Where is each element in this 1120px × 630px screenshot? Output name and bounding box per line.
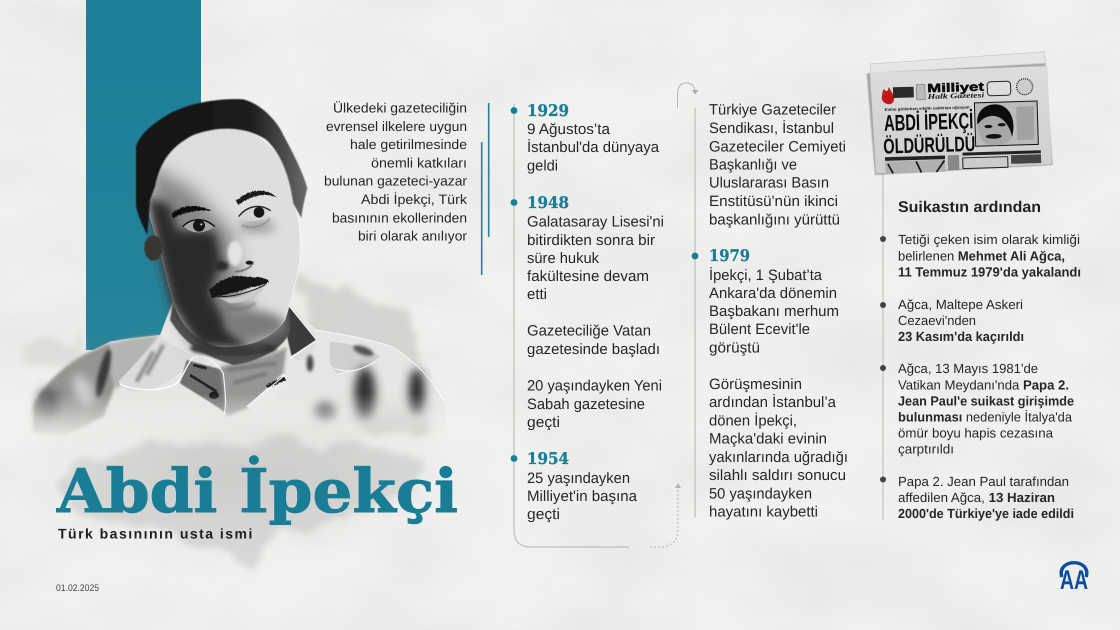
- aftermath item 1: [880, 232, 1081, 280]
- timeline: 1948: geçti: [527, 414, 560, 431]
- timeline: 1929: İstanbul'da dünyaya: [527, 138, 660, 156]
- intro paragraph: [324, 100, 467, 244]
- aftermath item 3: çarptırıldı: [898, 441, 954, 456]
- timeline: 1979: İpekçi, 1 Şubat’ta: [709, 266, 823, 284]
- masthead: [881, 78, 1033, 105]
- intro paragraph: Ülkedeki gazeteciliğin: [333, 100, 467, 116]
- timeline: 1954 continued: başkanlığını yürüttü: [709, 211, 840, 228]
- face: [145, 128, 300, 347]
- aftermath item 2: Ağca, Maltepe Askeri: [898, 297, 1023, 312]
- timeline: 1954: [511, 449, 638, 523]
- intro paragraph: Abdi İpekçi, Türk: [361, 192, 467, 207]
- masthead: Halk Gazetesi: [927, 91, 985, 101]
- aftermath item 2: [880, 297, 1024, 344]
- portrait: [27, 99, 448, 447]
- timeline: 1954: 25 yaşındayken: [527, 470, 630, 487]
- mouth: [218, 285, 265, 303]
- face midtone: [147, 163, 267, 347]
- newspaper photo: [974, 101, 1038, 146]
- aftermath item 4: 2000'de Türkiye'ye iade edildi: [898, 506, 1074, 521]
- timeline: 1948: bitirdikten sonra bir: [527, 232, 655, 249]
- face shadow: [147, 197, 250, 348]
- masthead: Milliyet: [927, 80, 984, 95]
- timeline: 1954 continued: Türkiye Gazeteciler: [709, 102, 836, 119]
- aftermath item 1: belirlenen Mehmet Ali Ağca,: [898, 249, 1065, 264]
- timeline: 1929: geldi: [527, 157, 558, 174]
- timeline: 1948: [511, 193, 664, 431]
- timeline: 1954: Milliyet'in başına: [527, 488, 638, 505]
- aftermath item 4: affedilen Ağca, 13 Haziran: [898, 490, 1055, 505]
- timeline: 1948: süre hukuk: [527, 250, 599, 267]
- timeline rail right with arrow: [678, 83, 698, 517]
- timeline: 1979: Görüşmesinin: [709, 376, 802, 393]
- timeline rail left with arrow: [514, 104, 681, 547]
- date: 01.02.2025: [56, 583, 99, 594]
- aftermath item 3: [880, 361, 1074, 456]
- timeline: 1979: Bülent Ecevit'le: [709, 321, 810, 338]
- aftermath item 3: ömür boyu hapis cezasına: [898, 425, 1054, 440]
- newspaper columns: [885, 150, 1041, 174]
- timeline: 1979: [692, 246, 848, 521]
- timeline: 1954: geçti: [527, 506, 560, 523]
- subtitle: Türk basınının usta ismi: [58, 526, 254, 542]
- aftermath item 3: Ağca, 13 Mayıs 1981'de: [898, 361, 1038, 376]
- timeline: 1979: görüştü: [709, 340, 760, 356]
- aftermath item 2: Cezaevi'nden: [898, 313, 976, 328]
- intro paragraph: evrensel ilkelere uygun: [326, 119, 467, 134]
- timeline: 1954 continued: Enstitüsü'nün ikinci: [709, 193, 838, 210]
- neck: [170, 303, 290, 365]
- timeline: 1948: 1948: [527, 193, 569, 212]
- intro paragraph: basınının ekollerinden: [332, 210, 467, 225]
- timeline: 1948: fakültesine devam: [527, 268, 649, 285]
- timeline: 1954: 1954: [527, 449, 569, 468]
- intro paragraph: biri olarak anılıyor: [358, 229, 467, 244]
- timeline: 1954 continued: Uluslararası Basın: [709, 175, 829, 192]
- watercolor stain: [20, 280, 435, 567]
- timeline: 1954 continued: Sendikası, İstanbul: [709, 119, 834, 137]
- aftermath item 3: bulunması nedeniyle İtalya'da: [898, 410, 1073, 424]
- timeline: 1948: 20 yaşındayken Yeni: [527, 378, 662, 395]
- timeline: 1929: 9 Ağustos’ta: [527, 121, 611, 138]
- timeline: 1979: silahlı saldırı sonucu: [709, 467, 846, 484]
- chin tone: [225, 311, 285, 339]
- aftermath item 1: Tetiği çeken isim olarak kimliği: [898, 232, 1080, 247]
- timeline: 1979: ardından İstanbul’a: [709, 393, 837, 411]
- newspaper headline 1: ABDİ İPEKÇİ: [884, 108, 974, 136]
- aftermath item 4: Papa 2. Jean Paul tarafından: [898, 474, 1069, 489]
- eyes: [183, 220, 214, 232]
- timeline: 1954 continued: [709, 102, 846, 228]
- timeline: 1979: yakınlarında uğradığı: [709, 449, 848, 466]
- timeline: 1979: Başbakanı merhum: [709, 303, 839, 320]
- eyebrows: [172, 206, 212, 218]
- aftermath item 3: Vatikan Meydanı'nda Papa 2.: [898, 377, 1069, 392]
- timeline: 1929: [511, 101, 660, 174]
- newspaper image: [867, 52, 1053, 175]
- aftermath item 1: 11 Temmuz 1979'da yakalandı: [898, 265, 1081, 280]
- timeline: 1948: Sabah gazetesine: [527, 396, 645, 413]
- intro paragraph: hale getirilmesinde: [350, 137, 467, 152]
- timeline: 1948: Gazeteciliğe Vatan: [527, 323, 651, 340]
- mustache: [209, 276, 269, 298]
- logo: AA: [1060, 563, 1088, 595]
- aftermath item 2: 23 Kasım'da kaçırıldı: [898, 329, 1024, 344]
- hair: [136, 99, 307, 235]
- timeline: 1979: 1979: [709, 246, 750, 265]
- timeline: 1979: Ankara'da dönemin: [709, 285, 837, 302]
- timeline: 1979: hayatını kaybetti: [709, 504, 818, 521]
- timeline: 1954 continued: Gazeteciler Cemiyeti: [709, 138, 846, 155]
- intro paragraph: önemli katkıları: [371, 155, 467, 170]
- newspaper headline 2: ÖLDÜRÜLDÜ: [883, 132, 976, 158]
- intro paragraph: bulunan gazeteci-yazar: [324, 174, 467, 189]
- timeline: 1954 continued: Başkanlığı ve: [709, 156, 797, 174]
- timeline: 1979: 50 yaşındayken: [709, 486, 812, 502]
- heading: aftermath: Suikastın ardından: [898, 199, 1041, 216]
- intro accent lines: [482, 103, 489, 275]
- timeline: 1979: dönen İpekçi,: [709, 412, 797, 430]
- aftermath item 3: Jean Paul'e suikast girişimde: [898, 393, 1074, 408]
- timeline: 1948: Galatasaray Lisesi'ni: [527, 214, 664, 231]
- timeline: 1948: etti: [527, 286, 547, 303]
- head: [136, 99, 307, 365]
- nose: [235, 262, 253, 272]
- main title: Abdi İpekçi: [56, 455, 458, 527]
- newspaper subhead: Evine girilerken silahlı saldırıya uğrayan: [884, 105, 970, 112]
- aftermath item 4: [880, 474, 1074, 521]
- timeline: 1929: 1929: [527, 101, 569, 120]
- ear: [144, 235, 162, 261]
- shirt: [30, 302, 444, 435]
- timeline: 1948: gazetesinde başladı: [527, 341, 660, 358]
- timeline: 1979: Maçka'daki evinin: [709, 431, 827, 448]
- logo: AA: AA: [1060, 565, 1088, 595]
- teal column: [86, 0, 201, 350]
- rail: aftermath: [882, 172, 884, 520]
